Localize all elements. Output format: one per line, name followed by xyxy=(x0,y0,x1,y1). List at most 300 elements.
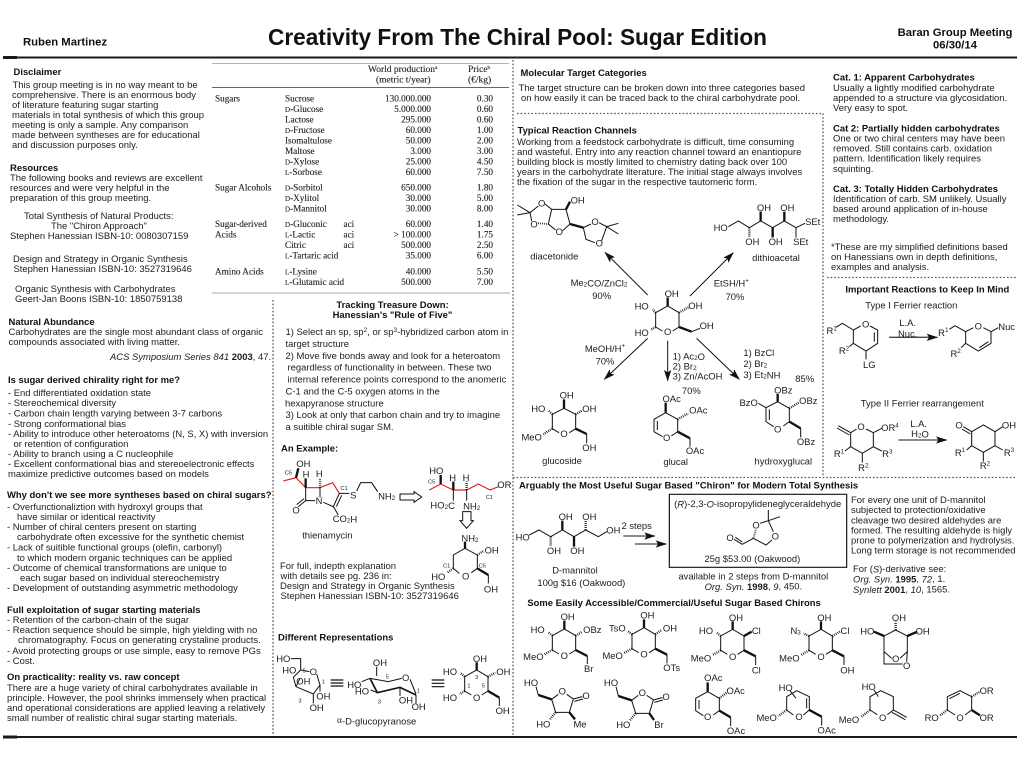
molecule: open chain intermediate: H xyxy=(463,472,470,483)
disclaimer: This group meeting is in no way meant to be xyxy=(12,80,198,91)
intro text: The target structure can be broken down into three categories based xyxy=(518,83,805,94)
table: world production and price: Sucrose xyxy=(285,94,314,104)
chiron 2: OH xyxy=(640,609,655,620)
conditions: hydroxyglucal: 1) BzCl xyxy=(743,347,774,358)
arrow: open retrosynthetic down xyxy=(460,512,473,528)
molecule: hydroxyglucal xyxy=(740,384,818,466)
table: world production and price: D-Xylose xyxy=(285,156,319,166)
chiron 2: O xyxy=(640,648,648,659)
chiron 1: HO xyxy=(531,624,545,635)
heading: tracking treasure: Tracking Treasure Down: xyxy=(336,300,449,311)
conditions: glucal: 2) Br xyxy=(673,360,693,371)
molecule: D-mannitol: OH xyxy=(547,545,561,556)
arrow: to dithioacetal xyxy=(690,253,733,296)
panel: category definitions xyxy=(831,72,1008,273)
chiron 3 xyxy=(691,612,761,675)
table: world production and price: 5.00 xyxy=(477,193,493,203)
table: world production and price: D-Gluconic xyxy=(285,219,327,229)
why not more syntheses: Why don't we see more syntheses based on chiral sugars? xyxy=(7,490,272,501)
molecule: dithioacetal: OH xyxy=(757,202,771,213)
molecule: thienamycin: 2 xyxy=(392,494,396,501)
molecule: boat representation: OH xyxy=(310,702,324,713)
note: S derivative references: Org. Syn. 1995, 72, 1. xyxy=(853,573,945,584)
table: world production and price: 50.000 xyxy=(406,136,431,146)
chiron 1: O xyxy=(561,650,568,661)
molecule: chair representation: 5 xyxy=(386,675,389,681)
reaction: Type I Ferrier: 1 xyxy=(945,326,949,333)
chiron 5: HO xyxy=(860,625,874,636)
chiron 4: 3 xyxy=(797,629,801,636)
heading: accessible chirons: Some Easily Accessible/Commercial/Useful Sugar Based Chirons xyxy=(527,597,821,608)
chiron 6 xyxy=(524,677,590,729)
reaction: Type II Ferrier: 2 xyxy=(865,462,869,469)
reaction: Type I Ferrier: O xyxy=(862,318,869,329)
molecule: dithioacetal: OH xyxy=(745,236,760,247)
molecule: dithioacetal: dithioacetal xyxy=(752,252,800,263)
chiron 8 xyxy=(696,672,745,736)
molecule: D-mannitol: OH xyxy=(606,524,621,535)
molecule: glucoside: glucoside xyxy=(542,455,582,466)
conditions: glucal: 1) Ac xyxy=(673,350,694,361)
molecule: flat pyranose: O xyxy=(473,692,480,703)
reaction: Type I Ferrier xyxy=(826,299,1015,370)
table: world production and price: 30.000 xyxy=(406,204,431,214)
conditions: acetonide: 2 xyxy=(624,281,628,288)
table: world production and price: World production xyxy=(368,65,435,75)
reaction: Type I Ferrier: O xyxy=(975,320,982,331)
disclaimer: and discussion purposes only. xyxy=(12,140,138,151)
table: world production and price: 60.000 xyxy=(406,219,431,229)
heading and text: the fixation of the sugar in the respective tautomeric form. xyxy=(517,177,757,188)
resources: Total Synthesis of Natural Products: xyxy=(24,211,174,222)
molecule: hydroxyglucal: OBz xyxy=(797,436,815,447)
full exploitation: - Cost. xyxy=(7,656,35,667)
table: world production and price: D-Sorbitol xyxy=(285,182,323,192)
chiron 6: O xyxy=(559,685,566,696)
further reading note: with details see pg. 236 in: xyxy=(280,571,392,582)
molecule: D-mannitol: OH xyxy=(582,511,597,522)
molecule: D-mannitol: OH xyxy=(559,511,573,522)
chiron 8: OAc xyxy=(727,685,745,696)
arrows: two steps: 2 steps xyxy=(621,520,652,531)
molecule: flat pyranose: 3 xyxy=(475,675,478,681)
molecule: diacetonide: O xyxy=(591,216,599,227)
table: world production and price: Sugar Alcohols xyxy=(215,182,272,192)
heading and text xyxy=(517,126,802,188)
molecule: flat pyranose: OH xyxy=(496,666,511,677)
molecule: chair representation: O xyxy=(402,672,409,683)
rule of five steps: a suitible chiral sugar SM. xyxy=(286,422,394,433)
table: world production and price: 7.00 xyxy=(477,277,493,287)
why not more syntheses: carbohydrate often excessive for the synthetic chemist xyxy=(17,532,245,543)
molecule: open chain intermediate: NH xyxy=(463,500,477,511)
further reading note: For full, indepth explanation xyxy=(280,561,396,572)
rule of five steps xyxy=(285,327,508,433)
note: aldehyde properties: Long term storage is not recommended xyxy=(851,544,1015,555)
rule of five steps: 3) Look at only that carbon chain and try to imagine xyxy=(286,410,500,421)
example structures xyxy=(283,458,512,594)
molecule: flat pyranose: HO xyxy=(443,666,457,677)
reaction: Type II Ferrier: 2 xyxy=(987,460,991,467)
note: S derivative references: For (S)-derivative see: xyxy=(853,563,946,574)
molecule: dithioacetal: HO xyxy=(714,222,728,233)
table: world production and price: 650.000 xyxy=(401,182,431,192)
on practicality: On practicality: reality vs. raw concept xyxy=(7,672,180,683)
chiron 7 xyxy=(604,677,670,730)
caption: alpha-D-glucopyranose: α-D-glucopyranose xyxy=(337,715,416,726)
why not more syntheses: - Number of chiral centers present on starting xyxy=(7,522,196,533)
reaction: Type I Ferrier: L.A. xyxy=(899,317,916,328)
rule of five steps: regardless of functionality in between. These two xyxy=(288,362,491,374)
molecule: open chain intermediate: H xyxy=(449,472,456,483)
disclaimer xyxy=(12,67,204,151)
disclaimer: Disclaimer xyxy=(14,67,62,78)
is sugar derived chirality right: - Ability to branch using a C nucleophile xyxy=(8,449,173,460)
heading and text: building block is mostly limited to chemistry dating back over 100 xyxy=(517,157,787,168)
molecule: central glucose xyxy=(635,288,714,338)
category 1: Very easy to spot. xyxy=(833,103,908,114)
conditions: glucal xyxy=(673,350,723,396)
reaction: Type II Ferrier: OH xyxy=(1002,419,1016,430)
molecule: glucal: OAc xyxy=(689,404,708,415)
further reading note: Stephen Hanessian ISBN-10: 3527319646 xyxy=(280,591,459,602)
molecule: thienamycin: H xyxy=(303,468,310,479)
table: world production and price: 1.75 xyxy=(477,230,493,240)
conditions: glucal: O xyxy=(698,350,705,361)
box: isopropylideneglyceraldehyde: O xyxy=(726,532,734,543)
table: world production and price: 1.00 xyxy=(477,125,493,135)
meeting info: Baran Group Meeting xyxy=(898,27,1013,39)
molecule: flat pyranose: 5 xyxy=(482,684,485,690)
natural abundance: Carbohydrates are the single most abundant class of organic xyxy=(8,327,263,338)
is sugar derived chirality right: - Strong conformational bias xyxy=(8,419,126,430)
molecule: glucal: OAc xyxy=(686,445,704,456)
conditions: hydroxyglucal: NH xyxy=(767,369,781,380)
why not more syntheses: - Overfunctionaliztion with hydroxyl groups that xyxy=(7,502,203,513)
table: world production and price: aci xyxy=(344,240,355,250)
chiron 8: OAc xyxy=(727,725,745,736)
molecule: boat representation xyxy=(276,653,331,713)
meeting info xyxy=(898,27,1013,52)
disclaimer: meeting is only a sample. Any comparison xyxy=(12,120,188,131)
table: world production and price: Sugars xyxy=(215,94,240,104)
molecule: glucal: glucal xyxy=(663,456,688,467)
molecule: open chain intermediate: OR xyxy=(497,479,512,490)
equivalence symbol xyxy=(331,680,343,686)
chiron 3: OH xyxy=(729,612,743,623)
chiron 11: O xyxy=(956,712,964,723)
table: world production and price: 5.000.000 xyxy=(394,104,431,114)
molecule: D-mannitol: OH xyxy=(570,545,585,556)
equivalence symbol xyxy=(432,680,444,687)
why not more syntheses xyxy=(7,490,272,594)
resources: Stephen Hanessian ISBN-10: 0080307159 xyxy=(10,231,188,242)
table: world production and price: Sugar-derived xyxy=(215,219,267,229)
molecule: open chain intermediate: HO xyxy=(429,465,443,476)
reaction: Type II Ferrier: 3 xyxy=(1011,446,1015,453)
table: world production and price: 30.000 xyxy=(406,193,431,203)
panel: typical reaction channels xyxy=(517,126,821,467)
arrow: open retrosynthetic right xyxy=(400,492,422,502)
molecule: glucoside: OH xyxy=(582,403,597,414)
conditions: glucal: 3) Zn/AcOH xyxy=(673,370,723,381)
reaction: Type II Ferrier: R xyxy=(858,462,865,473)
why not more syntheses: - Outcome of chemical transformations are unique to xyxy=(7,563,227,574)
molecule: flat pyranose: HO xyxy=(443,692,457,703)
chiron 9 xyxy=(756,682,836,735)
molecule: chair representation: OH xyxy=(399,694,413,705)
conditions: glucoside: + xyxy=(621,342,625,349)
molecule: open chain intermediate: 2 xyxy=(477,504,481,511)
resources: The following books and reviews are excellent xyxy=(10,173,203,184)
reaction: Type II Ferrier: H xyxy=(911,428,918,439)
conditions: thioacetal: 70% xyxy=(726,291,745,302)
molecule: central glucose: HO xyxy=(635,327,649,338)
reaction: Type I Ferrier: 2 xyxy=(957,347,961,354)
molecule: target sugar: 2 xyxy=(475,536,479,543)
reaction: Type I Ferrier: 2 xyxy=(846,345,850,352)
category 2: removed. Still contains carb. oxidation xyxy=(833,144,992,154)
reaction: Type I Ferrier: R xyxy=(839,345,846,356)
molecule: hydroxyglucal: OBz xyxy=(799,395,818,406)
conditions: acetonide: CO/ZnCl xyxy=(587,277,624,288)
molecule: central glucose: OH xyxy=(700,320,714,331)
molecule: target sugar: NH xyxy=(461,532,475,543)
reaction: Type II Ferrier: Type II Ferrier rearrangement xyxy=(861,397,984,408)
molecule: chair representation: HO xyxy=(347,679,361,690)
disclaimer: made between syntheses are for educational xyxy=(12,130,200,141)
molecule: glucal xyxy=(654,393,708,467)
header xyxy=(23,24,1013,52)
note: S derivative references: Synlett 2001, 10, 1565. xyxy=(853,583,950,594)
reaction: Type II Ferrier: R xyxy=(834,448,841,459)
conditions: glucal: 2 xyxy=(694,354,698,361)
reaction: Type I Ferrier: R xyxy=(826,325,833,336)
table: world production and price: > 100.000 xyxy=(394,230,431,240)
table: world production and price: L-Sorbose xyxy=(285,167,322,177)
table: world production and price: 2.00 xyxy=(477,136,493,146)
chiron 5: O xyxy=(892,653,899,664)
heading: Arguably the Most Useful Sugar Based "Chiron" for Modern Total Synthesis xyxy=(519,479,858,490)
molecule: flat pyranose: 1 xyxy=(467,684,471,690)
chiron 9: MeO xyxy=(756,712,777,723)
is sugar derived chirality right: - Carbon chain length varying between 3-7 carbons xyxy=(8,408,222,420)
molecule: boat representation: 5 xyxy=(303,668,306,674)
chiron 8: O xyxy=(704,711,711,722)
chiron 1: OBz xyxy=(583,624,602,635)
table: world production and price: 0.30 xyxy=(477,94,493,104)
full exploitation: chromatography. Focus on generating crystaline products. xyxy=(18,635,261,646)
conditions: thioacetal: EtSH/H xyxy=(714,277,745,288)
is sugar derived chirality right: or retention of configuration xyxy=(14,439,128,450)
note: aldehyde properties xyxy=(851,494,1015,555)
molecule: chair representation: OH xyxy=(412,701,426,712)
molecule: dithioacetal xyxy=(714,202,821,263)
table: world production and price: 60.000 xyxy=(406,167,431,177)
resources: Design and Strategy in Organic Synthesis xyxy=(13,254,188,265)
molecule: open chain intermediate xyxy=(428,465,512,511)
reaction: Type II Ferrier: 1 xyxy=(841,448,845,455)
rule of five steps: hexapyranose structure xyxy=(285,398,384,410)
category 1: Cat. 1: Apparent Carbohydrates xyxy=(833,72,975,84)
chiron 5 xyxy=(860,612,930,671)
chiron 7: O xyxy=(662,691,670,702)
reaction: Type II Ferrier: 4 xyxy=(895,422,899,429)
molecule: chair representation: HO xyxy=(355,685,369,696)
molecule: glucal: OAc xyxy=(663,393,681,404)
full exploitation: - Reaction sequence should be simple, high yielding with no xyxy=(7,625,257,636)
rule of five steps: 3 xyxy=(394,327,398,334)
chiron 2: OH xyxy=(663,622,677,633)
chiron 4 xyxy=(779,612,855,675)
table: world production and price: 40.000 xyxy=(406,266,431,276)
conditions: hydroxyglucal: 2) Br xyxy=(743,358,764,369)
table: world production and price: 60.000 xyxy=(406,125,431,135)
author name: Ruben Martinez xyxy=(23,36,107,48)
conditions: acetonide: Me xyxy=(571,277,584,288)
heading: Important Reactions to Keep In Mind xyxy=(845,283,1009,294)
reaction: Type I Ferrier: Type I Ferrier reaction xyxy=(865,299,957,310)
footnote: on Hanessians own in depth definitions, xyxy=(831,252,997,263)
table: world production and price: 7.50 xyxy=(477,167,493,177)
molecule: target sugar: OH xyxy=(485,544,499,555)
why not more syntheses: - Development of outstanding asymmetric methodology xyxy=(7,583,238,594)
molecule: chair representation: 1 xyxy=(417,689,420,695)
chiron 7: HO xyxy=(604,677,618,688)
conditions: glucoside xyxy=(585,342,625,366)
table: world production and price: 130.000.000 xyxy=(385,94,431,104)
chiron 3: O xyxy=(729,651,736,662)
molecule: open chain intermediate: C1 xyxy=(486,495,493,501)
chiron 11 xyxy=(925,685,994,723)
conditions: glucoside: MeOH/H xyxy=(585,343,621,354)
chiron 4: N xyxy=(790,625,797,636)
conditions: thioacetal xyxy=(714,277,749,302)
molecule: glucal: O xyxy=(663,432,670,443)
reaction: Type II Ferrier: R xyxy=(882,448,889,459)
chiron 7: Br xyxy=(654,719,664,730)
molecule: flat pyranose: OH xyxy=(496,705,510,716)
molecule: thienamycin: O xyxy=(292,504,300,515)
molecule: target sugar: OH xyxy=(484,583,498,594)
category 2 xyxy=(833,124,1005,175)
panel: left column xyxy=(7,67,272,724)
chiron 6: Me xyxy=(573,718,587,729)
molecule: thienamycin: CO xyxy=(333,513,347,524)
chiron 8: OAc xyxy=(704,672,723,683)
molecule: diacetonide: O xyxy=(530,218,538,229)
panel: rule of five xyxy=(280,300,512,602)
chiron 1: OH xyxy=(561,611,575,622)
molecule: target sugar: HO xyxy=(431,571,445,582)
table: world production and price: Acids xyxy=(215,230,237,240)
disclaimer: materials in total synthesis of which this group xyxy=(12,110,204,121)
molecule: dithioacetal: SEt xyxy=(805,216,821,227)
reaction: Type II Ferrier: R xyxy=(955,447,962,458)
molecule: thienamycin: C1 xyxy=(340,486,348,492)
molecule: thienamycin: 2 xyxy=(347,517,351,524)
table: world production and price: 1.80 xyxy=(477,182,493,192)
box: isopropylideneglyceraldehyde xyxy=(669,494,847,567)
molecule: chair representation: 3 xyxy=(378,699,381,705)
conditions: glucal: 70% xyxy=(682,385,701,396)
conditions: hydroxyglucal xyxy=(743,347,815,384)
note: aldehyde properties: formed. The resulting aldehyde is higly xyxy=(851,524,1012,535)
chiron 1: MeO xyxy=(523,651,544,662)
table: world production and price: 0.60 xyxy=(477,104,493,114)
reaction: Type I Ferrier: R xyxy=(950,348,957,359)
molecule: open chain intermediate: 2 xyxy=(445,503,449,510)
footnote: *These are my simplified definitions based xyxy=(831,242,1008,253)
table: world production and price: Maltose xyxy=(285,146,315,156)
rule of five steps: 2 xyxy=(364,327,368,334)
arrow: to glucal xyxy=(666,341,669,381)
chiron 9: OAc xyxy=(817,724,836,735)
is sugar derived chirality right: - Ability to introduce other heteroatoms (N, S, X) with inversion xyxy=(8,429,268,440)
note: aldehyde properties: prone to polymerization and hydrolysis. xyxy=(851,534,1014,545)
table: world production and price: 6.00 xyxy=(477,250,493,260)
heading and text: Working from a feedstock carbohydrate is difficult, time consuming xyxy=(517,137,794,148)
molecule: chair representation xyxy=(347,657,426,712)
molecule: target sugar: O xyxy=(462,570,469,581)
molecule: boat representation: 3 xyxy=(298,699,302,705)
table: world production and price: 3.00 xyxy=(477,146,493,156)
resources: preparation of this group meeting. xyxy=(10,193,151,204)
molecule: hydroxyglucal: OBz xyxy=(774,384,793,395)
table: world production and price: 1.40 xyxy=(477,219,493,229)
category 2: Cat 2: Partially hidden carbohydrates xyxy=(833,124,1000,134)
molecule: chair representation: OH xyxy=(373,657,387,668)
conditions: hydroxyglucal: 2 xyxy=(763,373,767,380)
note: availability: available in 2 steps from D-mannitol xyxy=(678,570,828,581)
category 3 xyxy=(833,184,1007,225)
natural abundance xyxy=(8,317,271,363)
molecule: boat representation: O xyxy=(310,666,317,677)
chiron 10: O xyxy=(879,712,886,723)
note: S derivative references xyxy=(853,563,950,594)
chiron 11: OR xyxy=(980,712,994,723)
molecule: dithioacetal: OH xyxy=(780,202,795,213)
molecule: D-mannitol: 100g $16 (Oakwood) xyxy=(537,577,625,588)
category 3: methodology. xyxy=(833,214,889,225)
resources: Geert-Jan Boons ISBN-10: 1850759138 xyxy=(15,294,182,305)
chiron 10: HO xyxy=(862,681,876,692)
chiron 5: OH xyxy=(916,625,930,636)
panel: different representations xyxy=(276,632,511,726)
chiron 3: MeO xyxy=(691,652,711,663)
reaction: Type II Ferrier: 1 xyxy=(962,446,966,453)
conditions: glucoside: 70% xyxy=(596,355,615,366)
molecule: boat representation: OH xyxy=(296,675,311,686)
table: world production and price: (metric t/year) xyxy=(376,74,431,86)
molecule: central glucose: HO xyxy=(635,300,649,311)
conditions: hydroxyglucal: 3) Et xyxy=(743,369,763,380)
reaction: Type I Ferrier: 1 xyxy=(833,325,837,332)
table: world production and price: 25.000 xyxy=(406,156,431,166)
natural abundance: compounds associated with living matter. xyxy=(8,337,180,348)
chiron 3: Cl xyxy=(752,664,761,675)
note: aldehyde properties: subjected to protection/oxidative xyxy=(851,504,986,515)
molecule: thienamycin: S xyxy=(350,489,356,500)
why not more syntheses: each sugar based on individual stereochemistry xyxy=(20,573,220,584)
panel: molecular target categories: Molecular Target Categories xyxy=(520,68,647,79)
molecule: open chain intermediate: HO xyxy=(430,499,445,510)
resources: Stephen Hanessian ISBN-10: 3527319646 xyxy=(14,264,192,275)
meeting info: 06/30/14 xyxy=(933,40,978,52)
resources: Resources xyxy=(10,163,58,174)
reaction: Type II Ferrier: R xyxy=(980,460,987,471)
chiron 4: MeO xyxy=(779,652,800,663)
